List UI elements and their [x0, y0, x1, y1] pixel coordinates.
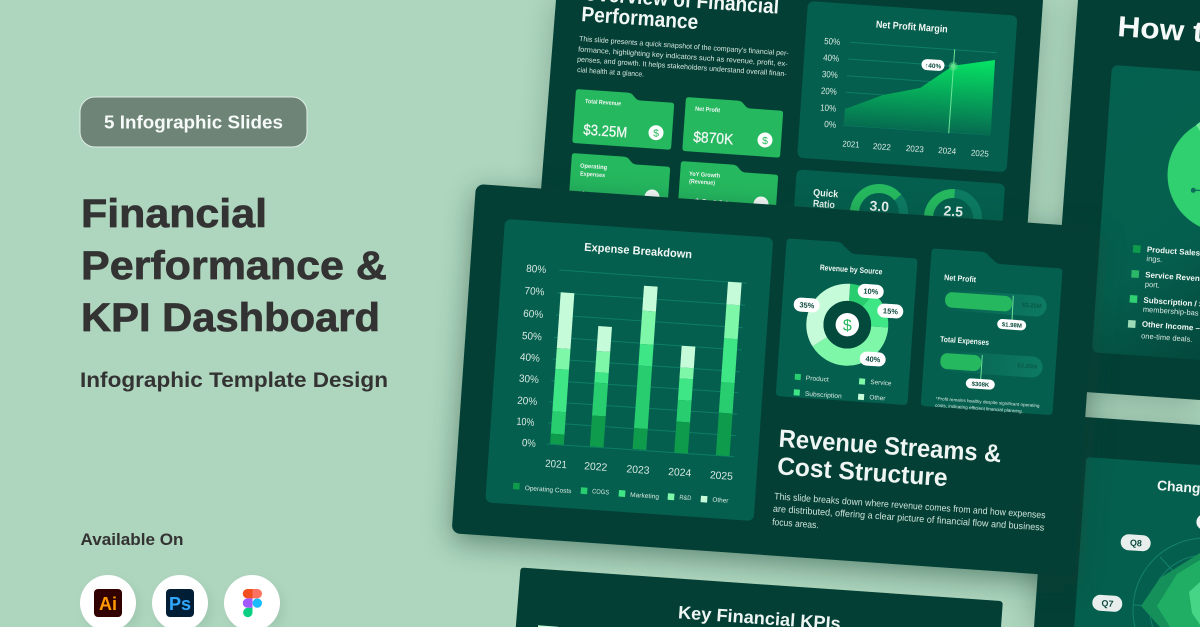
callouts: percentages — [793, 283, 904, 367]
main title: KPI Dashboard — [81, 296, 380, 340]
pie chart — [1168, 118, 1200, 232]
legend: revenue sources: Product — [806, 375, 829, 384]
legend: revenue sources — [794, 374, 892, 402]
x axis labels: 2022 — [584, 460, 608, 474]
gauge: net profit — [942, 273, 1047, 331]
legend: product sales: ings. — [1146, 254, 1163, 264]
callouts: percentages: 35% — [799, 300, 815, 310]
slide: overview of financial performance — [538, 0, 1043, 262]
panel: revenue by source: Revenue by Source — [820, 263, 883, 276]
legend: other income: Other Income – — [1142, 320, 1200, 333]
heading: revenue streams: Revenue Streams & — [778, 425, 1002, 468]
main title: Financial — [81, 192, 267, 236]
x axis labels: 2022 — [873, 141, 891, 152]
donut: 3.0 — [851, 185, 907, 241]
x axis labels — [545, 458, 733, 483]
main title: Performance & — [81, 244, 387, 288]
card: net profit — [682, 97, 784, 158]
paragraph: overview: formance, highlighting key indicators such as revenue, profit, ex- — [578, 45, 789, 68]
callouts: percentages: 10% — [863, 286, 879, 297]
radar polygons — [1141, 553, 1200, 627]
y axis labels: 10% — [820, 103, 837, 114]
legend: revenue sources: Service — [870, 379, 892, 387]
heading: overview — [581, 0, 780, 34]
heading: how t: How t — [1117, 11, 1200, 49]
gauge: total expenses: Total Expenses — [940, 335, 990, 347]
panel: net profit margin — [797, 1, 1017, 172]
footnote: costs, indicating efficient financial planning. — [935, 403, 1023, 414]
paragraph: overview: This slide presents a quick snapshot of the company's financial per- — [579, 34, 790, 58]
callouts: percentages: 15% — [883, 306, 899, 316]
panel: revenue by source — [776, 238, 918, 405]
icon: figma — [224, 575, 284, 627]
donut: 3.0: 3.0 — [869, 197, 890, 215]
y axis labels — [820, 36, 841, 130]
card: operating expenses — [568, 153, 671, 214]
gauge: net profit: Net Profit — [944, 273, 977, 284]
footnote: *Profit remains healthy despite significant operating — [936, 396, 1040, 408]
x axis labels: 2025 — [971, 148, 989, 159]
bar: 2022 — [590, 326, 612, 447]
x axis labels: 2024 — [668, 466, 692, 480]
y axis labels: 80% — [526, 263, 547, 276]
label: q8 — [1120, 534, 1151, 552]
paragraph: revenue streams — [772, 491, 1046, 534]
card: yoy growth: $2.1% — [693, 196, 730, 216]
icon: illustrator — [80, 575, 140, 627]
paragraph: overview: penses, and growth. It helps stakeholders understand overall finan- — [577, 55, 788, 78]
bar: 2021 — [550, 292, 574, 445]
legend: subscription — [1129, 295, 1200, 318]
card: net profit: $870K — [693, 129, 734, 148]
legend: product sales — [1133, 245, 1200, 264]
radar rings — [1133, 538, 1200, 627]
card: operating expenses: Operating — [580, 164, 608, 171]
marker line — [949, 49, 958, 133]
y axis labels: 40% — [823, 53, 840, 64]
card: total revenue: Total Revenue — [585, 99, 622, 108]
gauge: net profit: $1.98M — [1002, 322, 1022, 330]
card: yoy growth: YoY Growth — [689, 172, 721, 180]
heading: expense breakdown: Expense Breakdown — [584, 242, 692, 261]
icon: photoshop — [152, 575, 212, 627]
card: yoy growth — [677, 161, 779, 222]
y axis labels: 0% — [521, 437, 536, 450]
y axis labels: 50% — [521, 330, 542, 343]
card: operating expenses: Expenses — [580, 172, 606, 179]
donut chart — [813, 290, 882, 359]
footnote — [935, 396, 1040, 414]
callout: 40% — [921, 59, 945, 71]
gauge: total expenses — [938, 335, 1043, 390]
main slide: revenue streams and cost structure — [452, 184, 1098, 577]
y axis labels: 40% — [519, 351, 540, 365]
heading: revenue streams — [776, 425, 1002, 492]
card: total revenue: $3.25M — [583, 122, 628, 142]
callout: 40%: ↑40% — [925, 62, 942, 71]
paragraph: revenue streams: are distributed, offering a clear picture of financial flow and business — [772, 504, 1045, 534]
gauge: total expenses: $308K — [971, 382, 990, 389]
heading: revenue streams: Cost Structure — [776, 452, 949, 492]
y axis labels: 60% — [523, 308, 544, 321]
gauge: total expenses: $3.25M — [1017, 363, 1037, 371]
panel: quick ratio: Quick — [813, 188, 839, 200]
gauge: net profit: $3.25M — [1022, 303, 1042, 310]
label: q7: Q7 — [1101, 598, 1114, 609]
card: net profit: Net Profit — [695, 107, 720, 114]
label: q8: Q8 — [1130, 538, 1142, 548]
left column: badge: 5 Infographic Slides — [104, 112, 283, 132]
donut: 2.5 — [925, 190, 981, 246]
card: operating expenses: $1.17M — [579, 189, 624, 209]
subtitle: Infographic Template Design — [80, 369, 388, 392]
legend: subscription: membership-bas — [1143, 305, 1199, 318]
y axis labels: 30% — [822, 69, 838, 80]
panel: quick ratio — [792, 169, 1005, 254]
y axis labels: 50% — [824, 36, 841, 47]
bar: 2024 — [674, 346, 695, 454]
card: total revenue — [572, 89, 675, 150]
available on label: Available On — [80, 531, 184, 549]
heading: overview: Performance — [581, 3, 699, 34]
icon: dollar — [824, 301, 871, 349]
icon: dollar: $ — [843, 318, 852, 334]
legend: other income — [1128, 320, 1200, 344]
icon: photoshop: Ps — [169, 594, 191, 614]
label: top pill — [1196, 514, 1200, 532]
area chart — [844, 60, 995, 135]
legend: other income: one-time deals. — [1141, 331, 1193, 344]
x axis labels: 2021 — [545, 458, 567, 471]
y axis labels: 30% — [518, 373, 539, 386]
legend: service revenue: port. — [1145, 280, 1160, 290]
legend: expense categories: Other — [712, 497, 729, 505]
slide shadows — [540, 0, 1200, 627]
x axis labels: 2025 — [709, 469, 733, 483]
y axis labels: 70% — [524, 285, 545, 298]
slide: key financial kpis — [516, 568, 1003, 627]
legend: revenue sources: Subscription — [805, 391, 842, 400]
legend: expense categories: Operating Costs — [525, 485, 572, 495]
legend: expense categories: COGS — [592, 488, 610, 497]
panel: net profit and total expenses — [921, 248, 1063, 415]
legend: expense categories — [513, 483, 729, 505]
paragraph: overview: cial health at a glance. — [577, 65, 644, 79]
legend: revenue sources: Other — [869, 394, 886, 402]
legend: expense categories: Marketing — [630, 492, 660, 501]
y axis labels: 0% — [824, 119, 837, 130]
x axis labels — [842, 139, 989, 159]
panel: radar chart — [1074, 457, 1200, 627]
left column: badge — [80, 97, 307, 147]
card: net profit: $ — [762, 135, 768, 147]
panel: quick ratio: Ratio — [812, 199, 835, 211]
card: total revenue: $ — [653, 128, 659, 140]
panel: net profit margin: Net Profit Margin — [875, 20, 948, 36]
callouts: percentages: 40% — [865, 354, 881, 364]
paragraph: overview — [577, 34, 790, 79]
y axis labels: 20% — [821, 86, 837, 97]
legend: expense categories: R&D — [679, 494, 692, 502]
panel: expense breakdown — [485, 219, 773, 521]
legend: service revenue — [1131, 270, 1200, 290]
main slide shadow — [452, 192, 1098, 585]
card: yoy growth: (Revenue) — [689, 179, 715, 187]
y axis labels — [516, 263, 547, 450]
x axis labels: 2023 — [906, 143, 924, 154]
x axis labels: 2021 — [842, 139, 860, 150]
x axis labels: 2024 — [938, 145, 957, 156]
y axis labels: 10% — [516, 416, 535, 429]
x axis labels: 2023 — [626, 463, 650, 477]
main title — [81, 192, 387, 340]
bar: 2023 — [633, 286, 658, 450]
panel: pie and legend — [1092, 65, 1200, 366]
icon: illustrator: Ai — [99, 594, 117, 614]
label: q7 — [1092, 594, 1123, 612]
slide: changes radar — [1034, 414, 1200, 627]
paragraph: revenue streams: This slide breaks down where revenue comes from and how expenses — [774, 491, 1046, 521]
donut: 2.5: 2.5 — [943, 202, 964, 220]
y axis labels: 20% — [517, 395, 538, 408]
paragraph: revenue streams: focus areas. — [772, 517, 819, 531]
slide: how the revenue flows — [1050, 0, 1200, 400]
bar: 2025 — [716, 282, 742, 456]
